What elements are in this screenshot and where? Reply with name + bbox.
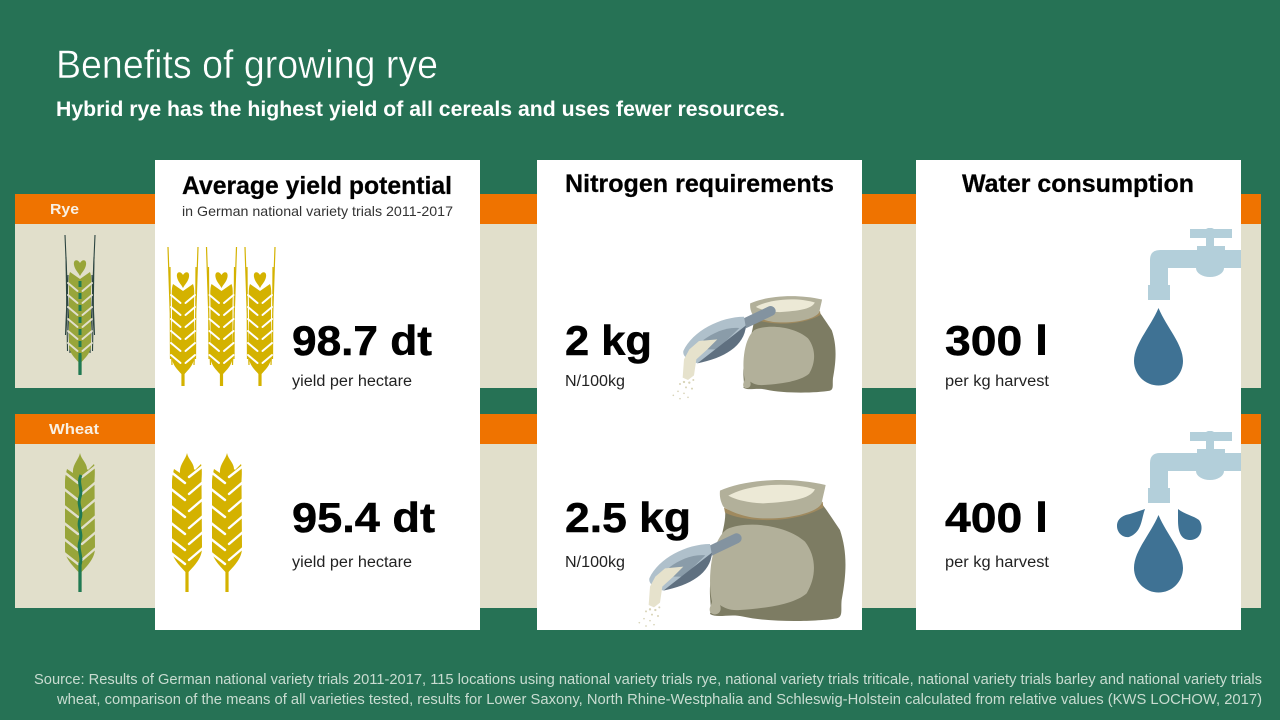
heading: water consumption: Water consumption xyxy=(962,170,1194,198)
source note: wheat, comparison of the means of all varieties tested, results for Lower Saxony, North Rhine-Westphalia and Schleswig-Holstein calculated from relative values (KWS LOCHOW, 2017) xyxy=(56,692,1262,708)
panel: average yield potential xyxy=(155,160,480,630)
label: Rye: Rye xyxy=(50,201,79,218)
icon: green wheat ear xyxy=(64,453,96,592)
caption: wheat yield: yield per hectare xyxy=(292,554,412,571)
title: Benefits of growing rye xyxy=(56,43,438,87)
heading: nitrogen requirements: Nitrogen requirements xyxy=(565,170,834,198)
heading: average yield potential: Average yield potential xyxy=(182,172,452,200)
icon: three rye ears xyxy=(168,247,275,386)
band: rye row xyxy=(15,194,1261,388)
icon: tap with one drop xyxy=(1134,228,1241,386)
source note xyxy=(34,672,1262,708)
value: rye water: 300 l xyxy=(945,317,1048,364)
icon: green rye ear xyxy=(65,235,95,375)
caption: rye yield: yield per hectare xyxy=(292,373,412,390)
caption: wheat nitrogen: N/100kg xyxy=(565,554,625,571)
caption: wheat water: per kg harvest xyxy=(945,554,1050,571)
icon: two wheat ears xyxy=(171,453,243,592)
value: rye yield: 98.7 dt xyxy=(292,317,432,364)
caption: rye water: per kg harvest xyxy=(945,373,1050,390)
icon: small sack with scoop xyxy=(672,296,836,400)
panel: water consumption xyxy=(916,160,1241,630)
value: wheat nitrogen: 2.5 kg xyxy=(565,494,691,541)
value: wheat water: 400 l xyxy=(945,494,1048,541)
source note: Source: Results of German national variety trials 2011-2017, 115 locations using national variety trials rye, national variety trials triticale, national variety trials barley and national variety trials xyxy=(34,672,1262,688)
icon: large sack with scoop xyxy=(638,480,845,627)
value: wheat yield: 95.4 dt xyxy=(292,494,435,541)
band: wheat row xyxy=(15,414,1261,608)
value: rye nitrogen: 2 kg xyxy=(565,317,652,364)
panel: nitrogen requirements xyxy=(537,160,862,630)
label: Wheat: Wheat xyxy=(49,421,99,438)
icon: tap with three drops xyxy=(1117,431,1241,592)
subtitle: Hybrid rye has the highest yield of all cereals and uses fewer resources. xyxy=(56,98,785,121)
panel subtitle: in German national variety trials 2011-2017 xyxy=(182,203,453,219)
caption: rye nitrogen: N/100kg xyxy=(565,373,625,390)
